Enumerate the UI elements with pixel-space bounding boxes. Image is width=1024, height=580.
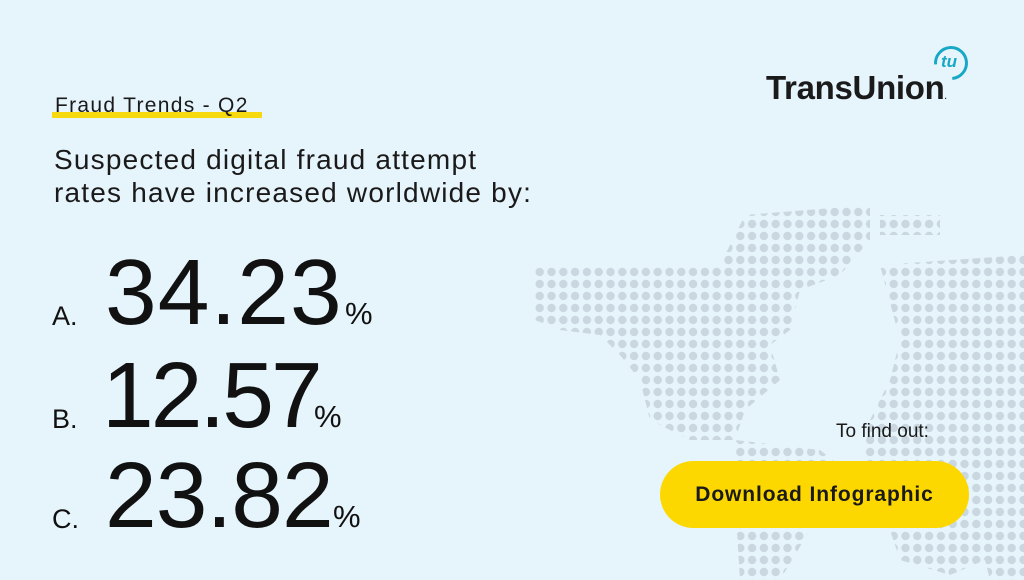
- button: Download Infographic: [660, 461, 969, 528]
- option B: %: [314, 399, 342, 434]
- button: Download Infographic: Download Infographic: [695, 483, 934, 506]
- logo: TransUnion: tu: [941, 52, 957, 71]
- headline: Suspected digital fraud attempt: [54, 144, 477, 175]
- option C: C.: [52, 504, 79, 534]
- headline: rates have increased worldwide by:: [54, 177, 532, 208]
- icon: tu circle: [927, 39, 975, 87]
- headline: [54, 144, 532, 208]
- eyebrow: Fraud Trends - Q2: Fraud Trends - Q2: [55, 94, 249, 117]
- option B: 12.57: [102, 343, 320, 447]
- option A: 34.23: [105, 240, 343, 344]
- option A: %: [345, 296, 373, 331]
- option C: 23.82: [105, 443, 333, 547]
- logo: TransUnion: TransUnion.: [766, 69, 946, 106]
- logo: TransUnion: [766, 46, 968, 106]
- text: To find out: To find out:: [836, 421, 929, 442]
- option B: B.: [52, 404, 78, 434]
- option A: A.: [52, 301, 78, 331]
- option C: %: [333, 499, 361, 534]
